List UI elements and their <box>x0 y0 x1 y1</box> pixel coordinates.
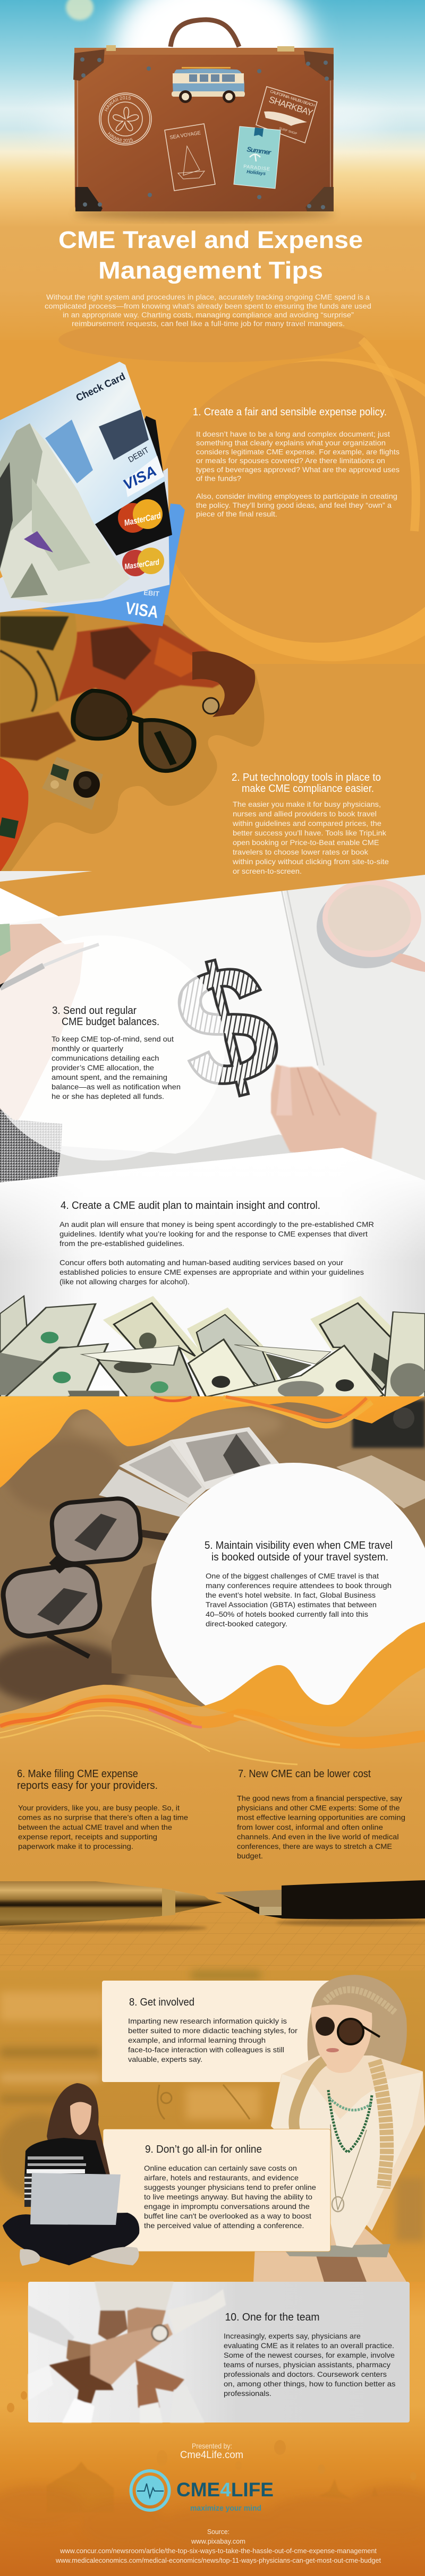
section 7 text: The good news from a financial perspective, say <box>237 1794 402 1803</box>
section 5 text <box>205 1540 393 1628</box>
panel: section 3 notebook photo background <box>0 871 425 1232</box>
face <box>311 2004 372 2073</box>
blue visa card: VISA <box>124 598 159 622</box>
sticker: Sharkbay <box>256 87 317 143</box>
section 7 text: physicians and other CME experts: Some of the <box>237 1804 400 1812</box>
check card <box>0 362 166 557</box>
section 6 text <box>17 1768 188 1850</box>
section 9 text: suggests younger physicians tend to prefer online <box>144 2183 316 2191</box>
black mastercard card: MasterCard <box>123 511 162 528</box>
section 3 text: he or she has depleted all funds. <box>52 1092 164 1101</box>
orange liquid wave, top of section 5 <box>0 1396 425 1488</box>
necklaces <box>328 2090 372 2152</box>
suitcase corners and latches <box>73 49 105 81</box>
section 3 text: 3. Send out regular <box>52 1005 137 1017</box>
temple and tree silhouettes <box>47 2462 378 2512</box>
section 9 text: airfare, hotels and restaurants, and evidence <box>144 2173 299 2182</box>
section 5 text: direct-booked category. <box>206 1619 287 1628</box>
section 7 text: channels. And even in the live world of medical <box>237 1832 399 1841</box>
paper grid <box>0 1912 425 1986</box>
section 9 text: to live meetings anyway. But having the ability to <box>144 2193 312 2201</box>
sticker: Sharkbay: SURF SHOP <box>278 127 298 136</box>
coffee cup <box>317 878 425 972</box>
braids <box>294 2061 324 2130</box>
section 1 text: something that clearly explains what your organization <box>196 439 386 447</box>
sticker: Sharkbay: SHARKBAY <box>268 95 314 118</box>
check card: VISA <box>121 463 159 493</box>
red wallet <box>0 758 28 872</box>
panel: section 1 orange swirl background <box>0 318 425 686</box>
section 2 text: within policy without clicking from site-to-site <box>232 857 389 866</box>
suitcase body <box>74 48 334 211</box>
section 10 text: professionals and doctors. Coursework centers <box>224 2370 387 2378</box>
suitcase handle <box>171 20 239 47</box>
section 9 text: buffet line can't be overlooked as a way to boost <box>144 2212 311 2220</box>
hand holding pen <box>0 924 99 1131</box>
section 8 text <box>128 1997 298 2063</box>
intro paragraph: complicated process—from knowing what’s already been spent to ensuring the funds are used <box>45 302 371 310</box>
section 5 text: the event’s hotel website. In fact, Global Business <box>206 1591 376 1599</box>
panel: section 8 card <box>102 1981 341 2082</box>
reading glasses <box>0 1497 170 1657</box>
section 1 text: 1. Create a fair and sensible expense policy. <box>193 406 387 418</box>
panel: section 2 solid orange background <box>0 664 425 887</box>
image: woman in sunglasses <box>253 1975 425 2282</box>
legs <box>253 2188 406 2282</box>
section 4 text: from the pre-established guidelines. <box>60 1239 184 1248</box>
sticker: Hawaii 2015 stamp: HAWAII 2015 <box>107 132 133 142</box>
section 7 text: most effective learning opportunities are coming <box>237 1813 405 1821</box>
blue visa card <box>41 504 185 626</box>
section 9 text <box>144 2144 316 2230</box>
section 9 text: Online education can certainly save costs on <box>144 2164 297 2172</box>
hair <box>47 2083 110 2183</box>
title <box>58 226 363 284</box>
section 7 text: conferences, there are ways to stretch a CME <box>237 1842 392 1850</box>
fountain pen <box>215 1880 425 1926</box>
section 4 text <box>60 1200 374 1286</box>
sources <box>55 2528 381 2564</box>
section 10 text: professionals. <box>224 2389 271 2398</box>
image: woman with laptop <box>3 2083 139 2266</box>
section 8 text: valuable, experts say. <box>128 2055 202 2063</box>
camera <box>352 1400 425 1448</box>
logo: CME4LIFE: maximize your mind <box>190 2504 261 2513</box>
tan book <box>112 1556 181 1678</box>
section 6 text: comes as no surprise that there’s often a lag time <box>18 1813 188 1821</box>
image: tinted travel flat-lay (bag, scarf, sunglasses, camera, watch) <box>0 611 265 886</box>
section 1 text: piece of the final result. <box>196 510 277 518</box>
section 10 text: Some of the newest courses, for example, involve <box>224 2351 395 2359</box>
section 3 text: balance—as well as notification when <box>52 1082 181 1091</box>
check card: DEBIT <box>126 446 150 464</box>
section 2 text <box>232 772 389 875</box>
sticker: Summer Paradise card: PARADISE <box>243 164 270 172</box>
presented by: Cme4Life.com <box>180 2450 243 2461</box>
logo mark <box>131 2471 169 2510</box>
translucent circle behind section 3 text <box>0 935 225 1161</box>
striped sleeve <box>24 2174 33 2207</box>
lips <box>326 2048 339 2052</box>
panel: blurred car background behind sections 8 and 9 <box>0 1971 425 2284</box>
section 4 text: guidelines. Identify what you’re looking for and the response to CME expenses that divert <box>60 1230 368 1238</box>
white mastercard card: MasterCard <box>124 558 160 572</box>
arms and chest <box>271 2055 425 2231</box>
white mastercard card <box>0 468 169 612</box>
section 2 text: open booking or Price-to-Beat enable CME <box>233 838 379 847</box>
sticker: Hawaii 2015 stamp: HAWAII 2015 <box>104 96 131 112</box>
title: CME Travel and Expense <box>58 226 363 253</box>
section 10 text: evaluating CME as it relates to an overall practice. <box>224 2341 394 2350</box>
sticker: Sea Voyage: SEA VOYAGE <box>169 130 201 141</box>
sources: Source: <box>207 2528 230 2536</box>
sticker: Summer Paradise card: Summer <box>246 145 272 157</box>
panel: sections 6 and 7 orange background with pens <box>0 1622 425 1986</box>
shorts <box>282 2244 390 2257</box>
section 6 text: between the actual CME travel and when the <box>18 1823 172 1831</box>
section 2 text: make CME compliance easier. <box>242 783 374 795</box>
sticker: Hawaii 2015 stamp <box>99 92 152 146</box>
footer background with temples and balloons <box>0 2282 425 2576</box>
panel: section 4 white background <box>0 1148 425 1402</box>
section 2 text: travelers to choose lower rates or book <box>233 848 369 856</box>
section 1 text: It doesn’t have to be a long and complex document; just <box>196 430 390 438</box>
section 6 text: paperwork make it to processing. <box>18 1842 133 1850</box>
ballpoint pen <box>0 1881 222 1932</box>
logo: CME4LIFE <box>131 2471 274 2513</box>
panel: section 9 card <box>103 2129 330 2251</box>
title: Management Tips <box>98 257 323 284</box>
section 1 text: or meals for spouses covered? Are there limitations on <box>196 456 385 465</box>
section 2 text: or screen-to-screen. <box>233 867 302 875</box>
section 2 text: nurses and allied providers to book travel <box>233 809 377 818</box>
laptop <box>30 2173 121 2225</box>
black mastercard card <box>95 416 172 556</box>
section 1 text: considers legitimate CME expense. For example, are flights <box>196 447 400 456</box>
sources: www.concur.com/newsroom/article/the-top-six-ways-to-take-the-hassle-out-of-cme-expense-management <box>60 2547 377 2555</box>
balloons <box>7 2391 416 2480</box>
sleeve <box>0 1108 62 1182</box>
sweater <box>24 2138 106 2178</box>
panel: section 5 photo of map, polaroids and glasses <box>0 1396 425 1720</box>
section 8 text: face-to-face interaction with colleagues is still <box>128 2045 284 2054</box>
sources: www.pixabay.com <box>191 2537 245 2545</box>
section 10 text <box>224 2311 395 2398</box>
section 8 text: better suited to more didactic teaching styles, for <box>128 2026 298 2035</box>
section 3 text: monthly or quarterly <box>52 1044 123 1053</box>
section 7 text <box>237 1768 405 1860</box>
presented by <box>180 2442 243 2461</box>
section 5 text: Travel Association (GBTA) estimates that between <box>206 1600 377 1609</box>
blue visa card: EBIT <box>143 588 160 598</box>
bag <box>0 612 76 723</box>
section 3 text: To keep CME top-of-mind, send out <box>52 1035 174 1043</box>
sunglasses <box>73 690 194 771</box>
check card: Check Card <box>74 371 127 404</box>
section 4 text: established policies to ensure CME expenses are appropriate and within your guidelines <box>60 1268 364 1276</box>
section 1 text: of the funds? <box>196 474 241 483</box>
sticker: van <box>172 67 245 103</box>
section 10 text: on, among other things, how to function better as <box>224 2379 395 2388</box>
section 4 text: 4. Create a CME audit plan to maintain insight and control. <box>61 1200 320 1212</box>
face <box>70 2102 91 2135</box>
section 9 text: engage in impromptu conversations around the <box>144 2202 310 2211</box>
hair back <box>308 1975 407 2085</box>
icon: striped dollar sign: $ <box>158 924 295 1129</box>
sources: www.medicaleconomics.com/medical-economics/news/top-11-ways-physicians-can-get-most-out-cme-budget <box>55 2556 381 2564</box>
panel: section 10 card <box>28 2282 410 2423</box>
white blob panel for section 5 <box>151 1463 425 1735</box>
section 8 text: 8. Get involved <box>129 1997 194 2008</box>
section 1 text: Also, consider inviting employees to participate in creating <box>196 492 397 500</box>
section 6 text: expense report, receipts and supporting <box>18 1832 157 1841</box>
presented by: Presented by: <box>192 2442 232 2450</box>
section 6 text: reports easy for your providers. <box>17 1780 158 1792</box>
section 10 text: Increasingly, experts say, physicians are <box>224 2332 361 2340</box>
icon: suitcase with stickers <box>73 17 334 224</box>
section 5 text: 5. Maintain visibility even when CME travel <box>205 1540 393 1551</box>
image: credit cards and crumpled bill <box>0 362 185 626</box>
section 9 text: the perceived value of attending a conference. <box>144 2221 304 2230</box>
intro paragraph: reimbursement requests, can feel like a full-time job for many travel managers. <box>72 320 345 328</box>
watch <box>192 651 255 717</box>
top <box>271 2072 423 2248</box>
section 4 text: An audit plan will ensure that money is being spent accordingly to the pre-established CMR <box>60 1220 374 1229</box>
section 1 text: the policy. They’ll bring good ideas, and feel they “own” a <box>196 501 392 509</box>
section 2 text: The easier you make it for busy physicians, <box>233 800 381 808</box>
panel: section 2 orange lower edge <box>0 850 425 924</box>
section 6 text: Your providers, like you, are busy people. So, it <box>18 1804 180 1812</box>
section 10 text: 10. One for the team <box>225 2311 320 2323</box>
section 4 text: Concur offers both automating and human-based auditing services based on your <box>60 1258 343 1267</box>
section 7 text: budget. <box>237 1852 263 1860</box>
logo: CME4LIFE: CME4LIFE <box>176 2479 274 2501</box>
flowing ribbon <box>0 1700 425 1764</box>
sticker: Summer Paradise card <box>234 126 280 189</box>
notebook <box>336 1455 425 1508</box>
sticker: Sea Voyage <box>165 124 215 191</box>
crumpled dollar bill <box>0 423 130 603</box>
section 4 text: (like not allowing charges for alcohol). <box>60 1277 190 1286</box>
section 5 text: is booked outside of your travel system. <box>211 1551 388 1563</box>
section 5 text: One of the biggest challenges of CME travel is that <box>206 1572 379 1580</box>
hand on notebook <box>271 1064 377 1161</box>
image: team hands stacked <box>28 2282 226 2423</box>
sticker: Summer Paradise card: Holidays <box>246 169 266 176</box>
legs <box>3 2213 139 2265</box>
section 7 text: from lower cost, informal and often online <box>237 1823 383 1831</box>
section 1 text: types of beverages approved? What are the approved uses <box>196 465 400 474</box>
section 10 text: teams of nurses, physician assistants, pharmacy <box>224 2360 390 2369</box>
header background: sky and sand <box>0 0 425 340</box>
section 3 text: provider’s CME allocation, the <box>52 1063 154 1072</box>
section 3 text: CME budget balances. <box>62 1016 159 1028</box>
section 5 text: 40–50% of hotels booked currently fall into this <box>206 1610 368 1618</box>
intro paragraph: Without the right system and procedures in place, accurately tracking ongoing CME spend is a <box>46 293 370 301</box>
section 5 text: many conferences require attendees to book through <box>206 1581 392 1590</box>
headband <box>325 1990 396 2013</box>
section 6 text: 6. Make filing CME expense <box>17 1768 138 1780</box>
camera <box>42 757 103 810</box>
section 3 text: amount spent, and the remaining <box>52 1073 167 1081</box>
intro paragraph: in an appropriate way. Charting costs, managing compliance and avoiding “surprise” <box>63 311 354 319</box>
intro paragraph <box>45 293 371 328</box>
section 2 text: within guidelines and compared prices, the <box>232 819 381 828</box>
sticker: Sharkbay: CALIFORNIA - MALIBU BEACH <box>269 89 316 108</box>
section 8 text: Imparting new research information quickly is <box>128 2017 287 2025</box>
section 8 text: example, and informal learning through <box>128 2036 266 2044</box>
shoes <box>20 2249 40 2266</box>
section 3 text: communications detailing each <box>52 1054 159 1062</box>
polaroids <box>99 1427 279 1517</box>
section 9 text: 9. Don’t go all-in for online <box>145 2144 262 2155</box>
car silhouette <box>158 2085 250 2119</box>
scarf <box>0 621 251 761</box>
section 2 text: better success you’ll have. Tools like TripLink <box>233 829 387 837</box>
section 3 text <box>52 1005 181 1101</box>
section 7 text: 7. New CME can be lower cost <box>238 1768 371 1780</box>
section 2 text: 2. Put technology tools in place to <box>232 772 381 783</box>
section 1 text <box>193 406 400 518</box>
sunglasses <box>316 2017 380 2044</box>
image: pile of dollar bills <box>0 1296 425 1398</box>
